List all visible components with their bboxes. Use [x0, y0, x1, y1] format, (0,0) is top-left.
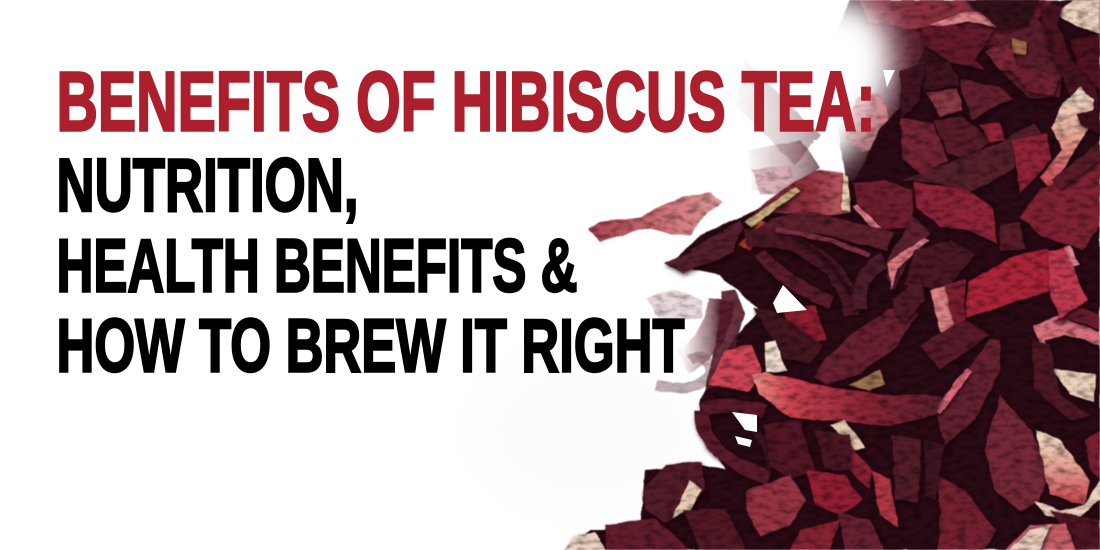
dark leaf with pink rim: [935, 340, 1000, 445]
top petals: [930, 10, 998, 28]
white gaps between petals: [732, 70, 895, 447]
red-pink and cream at the stem: [708, 345, 762, 392]
tubular ribbed petals: [762, 222, 890, 242]
big leaf bottom right: [985, 395, 1050, 512]
cream petal bottom right: [1035, 430, 1090, 505]
faded leaves behind the heading: [735, 60, 820, 165]
lower loop: [702, 405, 770, 478]
long purple leaf: [783, 305, 827, 345]
white fade across the upper petals: [0, 0, 892, 185]
lower mid petals: [830, 420, 865, 450]
bright stem petal: [752, 372, 942, 426]
red petals: [965, 248, 1052, 318]
heading: [56, 54, 876, 388]
heading line 4: HOW TO BREW IT RIGHT: [56, 304, 684, 388]
right middle petals: [1033, 315, 1100, 370]
upper petals that fade out: [825, 0, 1100, 200]
heading line 3: HEALTH BENEFITS &: [56, 224, 578, 308]
bottom petals: [745, 475, 806, 537]
cream petal upper right: [1040, 87, 1093, 190]
pink rimmed leaf: [887, 217, 930, 290]
big pink maroon petal: [747, 170, 850, 220]
heading line 2: NUTRITION,: [56, 143, 358, 227]
loose petal: [588, 192, 722, 242]
swirl fading at lower left: [647, 290, 703, 322]
middle petals: [900, 118, 948, 175]
main dark mass: [565, 0, 1100, 550]
pile of petals: [564, 0, 1100, 550]
